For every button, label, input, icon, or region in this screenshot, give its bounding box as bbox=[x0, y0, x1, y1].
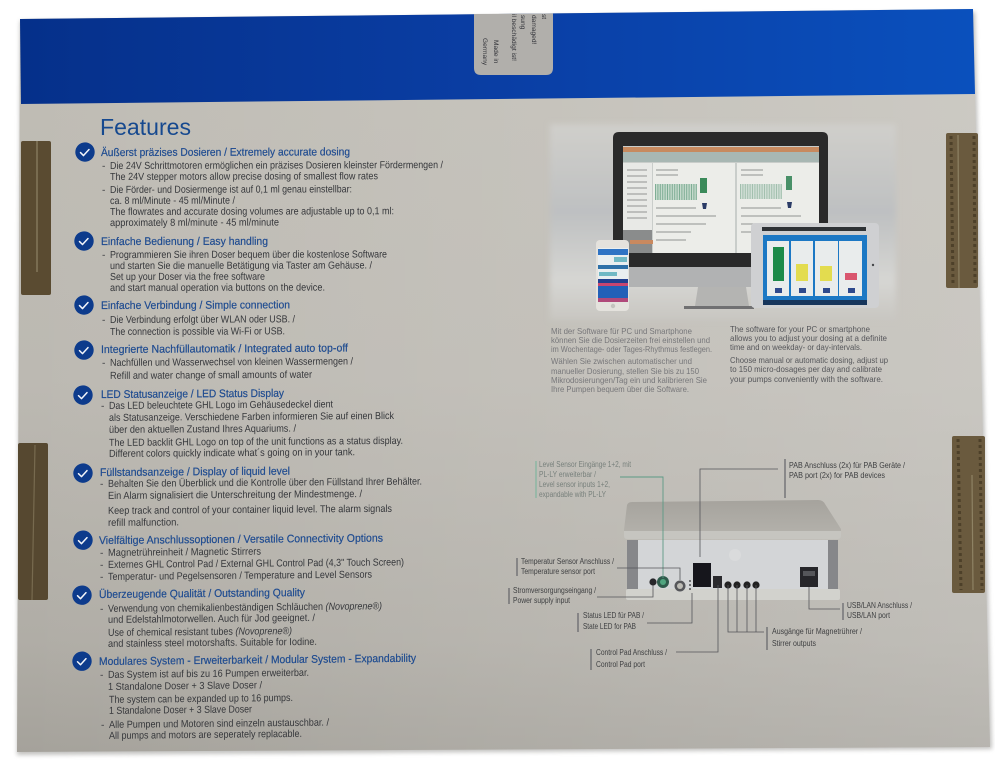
description bbox=[102, 160, 443, 229]
device lid bbox=[624, 500, 841, 539]
callout: control pad: Control Pad Anschluss / bbox=[596, 648, 668, 657]
callout: status LED: Status LED für PAB / bbox=[583, 611, 645, 620]
description: - bbox=[100, 604, 103, 615]
description: 1 Standalone Doser + 3 Slave Doser / bbox=[108, 680, 262, 693]
icon: check badge bbox=[72, 651, 92, 671]
feature: accurate dosing bbox=[75, 141, 443, 229]
callout: stirrer outputs bbox=[728, 585, 863, 650]
description: Keep track and control of your container liquid level. The alarm signals bbox=[108, 504, 392, 517]
callout: PAB port: PAB Anschluss (2x) für PAB Geräte / bbox=[789, 461, 906, 470]
label text: Made in Germany bbox=[481, 14, 547, 66]
callout: level sensor bbox=[536, 460, 663, 578]
German software description: Ihre Pumpen bequem über die Software. bbox=[551, 385, 689, 394]
description: - bbox=[102, 315, 105, 326]
description: refill malfunction. bbox=[108, 517, 179, 529]
description: Ein Alarm signalisiert die Unterschreitung der Mindestmenge. / bbox=[108, 489, 362, 502]
callout: level sensor: PL-LY erweiterbar / bbox=[539, 470, 597, 479]
description: - bbox=[102, 250, 105, 261]
description: Set up your Doser via the free software bbox=[110, 272, 265, 283]
callout: stirrer outputs: Stirrer outputs bbox=[772, 639, 816, 648]
cardboard cutout: right bottom bbox=[952, 436, 985, 593]
heading: Modulares System - Erweiterbarkeit / Modular System - Expandability bbox=[99, 653, 416, 668]
description: - bbox=[102, 185, 105, 196]
callout: level sensor: expandable with PL-LY bbox=[539, 490, 607, 499]
description: 1 Standalone Doser + 3 Slave Doser bbox=[109, 704, 253, 717]
callout: status LED bbox=[578, 593, 692, 632]
feature: auto top-off bbox=[74, 339, 353, 382]
description bbox=[100, 601, 382, 650]
tablet bbox=[751, 223, 879, 308]
description: The flowrates and accurate dosing volumes are adjustable up to 0,1 ml: bbox=[110, 206, 394, 218]
icon: check badge bbox=[73, 385, 93, 405]
heading: Einfache Verbindung / Simple connection bbox=[101, 299, 290, 312]
product label tab bbox=[474, 14, 553, 75]
German software description: Mikrodosierungen/Tag ein und kalibrieren Sie bbox=[551, 376, 707, 385]
label text: Made in Germany: st bbox=[540, 14, 547, 19]
description bbox=[100, 476, 422, 529]
description: The connection is possible via Wi-Fi or USB. bbox=[110, 326, 285, 338]
English software description: Choose manual or automatic dosing, adjust up bbox=[730, 355, 888, 365]
English software description: allows you to adjust your dosing at a definite bbox=[730, 333, 887, 343]
callout: control pad: Control Pad port bbox=[596, 660, 646, 669]
description: Die Verbindung erfolgt über WLAN oder USB. / bbox=[110, 314, 295, 326]
callout: control pad bbox=[591, 585, 718, 670]
heading: Einfache Bedienung / Easy handling bbox=[101, 236, 268, 248]
description: Different colors quickly indicate what´s going on in your tank. bbox=[109, 446, 355, 460]
description: The 24V stepper motors allow precise dosing of smallest flow rates bbox=[110, 171, 378, 183]
icon: check badge bbox=[74, 295, 94, 315]
description: Das LED beleuchtete GHL Logo im Gehäusedeckel dient bbox=[109, 399, 333, 412]
cardboard cutout: left bottom bbox=[18, 443, 48, 600]
German software description: Mit der Software für PC und Smartphone bbox=[551, 327, 692, 336]
description: Refill and water change of small amounts of water bbox=[110, 370, 313, 382]
icon: check badge bbox=[74, 231, 94, 251]
description: und starten Sie die manuelle Betätigung via Taster am Gehäuse. / bbox=[110, 261, 372, 272]
heading: Füllstandsanzeige / Display of liquid level bbox=[100, 466, 290, 479]
German software description: können Sie die Dosierzeiten frei einstellen und bbox=[551, 336, 710, 345]
English software description: The software for your PC or smartphone bbox=[730, 324, 870, 334]
description bbox=[100, 668, 329, 742]
callout: level sensor: Level sensor inputs 1+2, bbox=[539, 480, 610, 489]
monitor bbox=[613, 132, 828, 287]
description: ca. 8 ml/Minute - 45 ml/Minute / bbox=[110, 196, 235, 207]
label text: Made in Germany: damaged! bbox=[530, 15, 537, 44]
label text: Made in Germany: sung bbox=[519, 15, 526, 30]
description: All pumps and motors are seperately replacable. bbox=[109, 729, 302, 742]
feature: liquid level bbox=[73, 461, 422, 529]
description: The LED backlit GHL Logo on top of the unit functions as a status display. bbox=[109, 436, 403, 449]
label text: Made in Germany: Germany bbox=[481, 38, 488, 66]
smartphone bbox=[596, 240, 629, 311]
heading: LED Statusanzeige / LED Status Display bbox=[101, 388, 284, 401]
callout: temperature sensor bbox=[517, 557, 680, 580]
screen bbox=[623, 146, 819, 253]
description: - bbox=[100, 479, 103, 490]
heading: Äußerst präzises Dosieren / Extremely accurate dosing bbox=[101, 146, 350, 159]
description: Verwendung von chemikalienbeständigen Schläuchen (Novoprene®) bbox=[108, 601, 382, 615]
callout: USB/LAN bbox=[809, 587, 913, 620]
software photo background bbox=[550, 124, 896, 320]
callout: USB/LAN: USB/LAN port bbox=[847, 611, 891, 620]
description: - bbox=[100, 572, 103, 583]
icon: check badge bbox=[73, 463, 93, 483]
cardboard cutout: left top bbox=[21, 141, 51, 295]
feature: modular system bbox=[72, 648, 416, 742]
description: Use of chemical resistant tubes (Novoprene®) bbox=[108, 626, 292, 639]
callout: PAB port: PAB port (2x) for PAB devices bbox=[789, 471, 885, 480]
English software description: your pumps conveniently with the software. bbox=[730, 374, 883, 384]
ports bbox=[649, 563, 818, 592]
feature: outstanding quality bbox=[72, 583, 382, 650]
description: - bbox=[100, 670, 103, 681]
description: Magnetrühreinheit / Magnetic Stirrers bbox=[108, 547, 261, 559]
connection diagram bbox=[509, 459, 913, 670]
description bbox=[102, 356, 353, 382]
callout: PAB port bbox=[700, 459, 906, 557]
label text: Made in Germany: Made in bbox=[492, 40, 499, 64]
description: Nachfüllen und Wasserwechsel von kleinen Wassermengen / bbox=[110, 356, 353, 369]
description: The system can be expanded up to 16 pumps. bbox=[109, 693, 293, 706]
callout: power supply: Power supply input bbox=[513, 596, 571, 605]
description: über den aktuellen Zustand Ihres Aquariums. / bbox=[109, 424, 296, 436]
description: Programmieren Sie ihren Doser bequem über die kostenlose Software bbox=[110, 249, 387, 261]
description: - bbox=[100, 560, 103, 571]
description bbox=[101, 399, 403, 460]
description bbox=[102, 314, 295, 338]
description: - bbox=[100, 548, 103, 559]
icon: check badge bbox=[73, 530, 93, 550]
callout: level sensor: Level Sensor Eingänge 1+2, mit bbox=[539, 460, 632, 469]
callout: status LED: State LED for PAB bbox=[583, 622, 636, 631]
German software description bbox=[551, 327, 712, 394]
heading: Vielfältige Anschlussoptionen / Versatile Connectivity Options bbox=[99, 533, 383, 547]
English software description bbox=[730, 324, 888, 384]
description: Temperatur- und Pegelsensoren / Temperature and Level Sensors bbox=[108, 570, 372, 583]
callout: USB/LAN: USB/LAN Anschluss / bbox=[847, 601, 913, 610]
description: Die Förder- und Dosiermenge ist auf 0,1 ml genau einstellbar: bbox=[110, 184, 352, 196]
software devices illustration bbox=[596, 132, 879, 311]
device bbox=[624, 500, 841, 600]
feature: connectivity options bbox=[73, 528, 404, 583]
feature: simple connection bbox=[74, 295, 295, 338]
monitor stand bbox=[684, 287, 754, 309]
icon: check badge bbox=[74, 340, 94, 360]
description: - bbox=[102, 161, 105, 172]
blue header band bbox=[20, 9, 975, 104]
callout: power supply: Stromversorgungseingang / bbox=[513, 586, 597, 595]
description: Behalten Sie den Überblick und die Kontrolle über den Füllstand Ihrer Behälter. bbox=[108, 476, 422, 490]
description: - bbox=[102, 358, 105, 369]
callout: stirrer outputs: Ausgänge für Magnetrührer / bbox=[772, 627, 863, 636]
description: und Edelstahlmotorwellen. Auch für Jod geeignet. / bbox=[108, 613, 315, 626]
description: and stainless steel motorshafts. Suitable for Iodine. bbox=[108, 637, 317, 650]
English software description: to 150 micro-dosages per day and calibrate bbox=[730, 364, 882, 374]
German software description: im Wochentage- oder Tages-Rhythmus festlegen. bbox=[551, 345, 712, 354]
description: - bbox=[101, 720, 104, 731]
description: Die 24V Schrittmotoren ermöglichen ein präzises Dosieren kleinster Fördermengen / bbox=[110, 160, 443, 172]
icon: check badge bbox=[75, 142, 95, 162]
English software description: time and on weekday- or day-intervals. bbox=[730, 342, 862, 352]
title: Features bbox=[100, 114, 191, 140]
callout: temperature sensor: Temperatur Sensor Anschluss / bbox=[521, 557, 615, 566]
device body bbox=[638, 540, 828, 590]
callout: power supply bbox=[509, 585, 653, 605]
description: approximately 8 ml/minute - 45 ml/minute bbox=[110, 218, 279, 229]
icon: check badge bbox=[72, 585, 92, 605]
heading: Integrierte Nachfüllautomatik / Integrated auto top-off bbox=[101, 342, 349, 356]
description: Das System ist auf bis zu 16 Pumpen erweiterbar. bbox=[108, 668, 309, 681]
feature: easy handling bbox=[74, 231, 387, 294]
German software description: manueller Dosierung, stellen Sie bis zu 150 bbox=[551, 367, 699, 376]
description bbox=[102, 249, 387, 294]
features column bbox=[72, 114, 443, 742]
label text: Made in Germany: il beschädigt ist! bbox=[510, 14, 517, 61]
description: Externes GHL Control Pad / External GHL Control Pad (4,3" Touch Screen) bbox=[108, 557, 404, 571]
heading: Überzeugende Qualität / Outstanding Quality bbox=[99, 587, 305, 601]
feature: LED status display bbox=[73, 383, 403, 460]
description bbox=[100, 545, 404, 583]
callout: temperature sensor: Temperature sensor port bbox=[521, 567, 596, 576]
description: Alle Pumpen und Motoren sind einzeln austauschbar. / bbox=[109, 718, 329, 731]
description: als Statusanzeige. Verschiedene Farben informieren Sie auf einen Blick bbox=[109, 411, 395, 424]
description: and start manual operation via buttons on the device. bbox=[110, 283, 325, 294]
cardboard cutout: right top bbox=[946, 133, 978, 288]
description: - bbox=[101, 401, 104, 412]
German software description: Wählen Sie zwischen automatischer und bbox=[551, 357, 692, 366]
